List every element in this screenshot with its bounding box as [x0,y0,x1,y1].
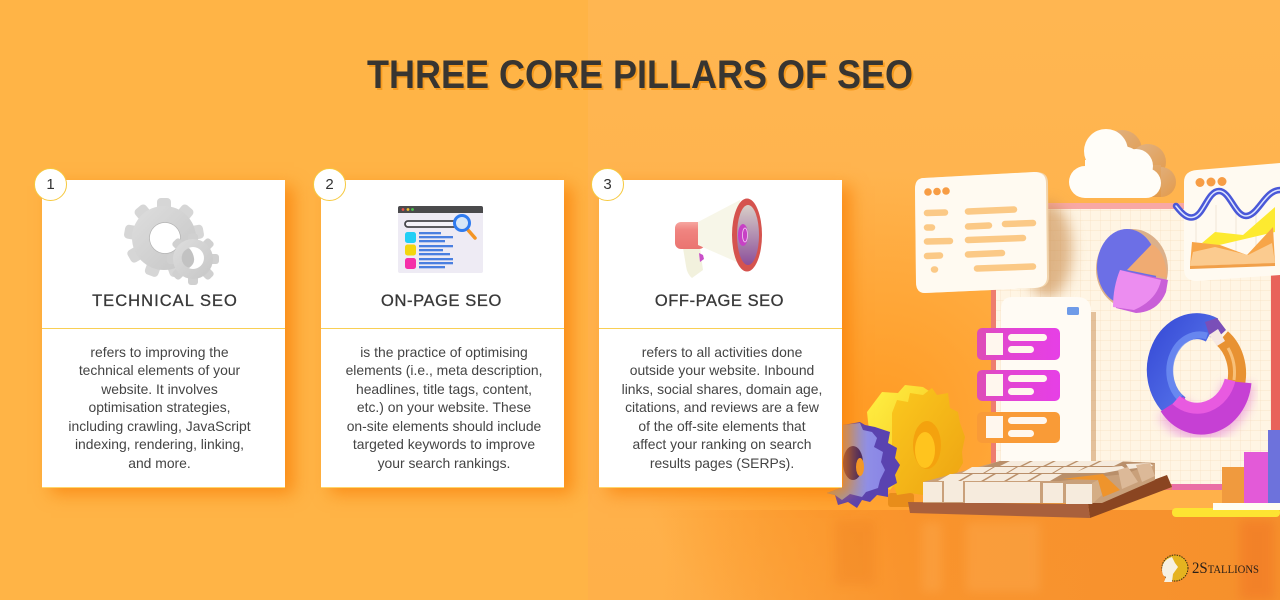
heading: ON-PAGE SEO [381,292,502,310]
text block: headlines, title tags, content, [356,381,532,397]
logo: 2Stallions [1162,554,1259,582]
keyboard [908,461,1172,518]
text block: refers to improving the [90,344,229,360]
panel: on-page SEO [321,180,564,488]
text block: affect your ranking on search [633,436,811,452]
text block: of the off-site elements that [638,418,806,434]
text block: results pages (SERPs). [650,455,794,471]
heading: OFF-PAGE SEO [655,292,784,310]
text block: optimisation strategies, [88,399,231,415]
text block: on-site elements should include [347,418,541,434]
badge: 2 [313,168,346,201]
text block: and more. [128,455,191,471]
text block: citations, and reviews are a few [625,399,819,415]
gear: yellow [867,385,965,507]
icon: megaphone [675,198,762,278]
window: code card [915,172,1049,293]
icon: horse head [1162,555,1188,582]
pie chart [1096,229,1168,313]
text block: including crawling, JavaScript [68,418,251,434]
list items [977,328,1060,443]
text block: etc.) on your website. These [357,399,531,415]
panel: technical SEO [42,180,285,488]
donut chart [1160,318,1238,425]
icon: browser search [398,206,483,273]
text block [68,344,251,471]
text block: elements (i.e., meta description, [346,362,542,378]
text block: indexing, rendering, linking, [75,436,244,452]
gear: purple [827,422,900,508]
text block: links, social shares, domain age, [622,381,822,397]
badge: 3: 3 [603,176,612,193]
badge: 3 [591,168,624,201]
text block: your search rankings. [378,455,510,471]
phone [1001,297,1096,482]
bar chart [1172,430,1280,517]
badge: 1 [34,168,67,201]
illustration: SEO dashboard [827,129,1280,518]
text block: website. It involves [101,381,218,397]
text block: is the practice of optimising [360,344,528,360]
text block: targeted keywords to improve [353,436,535,452]
text block: refers to all activities done [642,344,802,360]
text block [346,344,542,471]
board [991,203,1280,490]
panel: off-page SEO [599,180,842,488]
badge: 2: 2 [325,176,334,193]
logo: 2Stallions: 2STALLIONS [1192,560,1259,577]
chart card [1176,163,1280,281]
badge: 1: 1 [46,176,55,193]
heading: TECHNICAL SEO [92,292,238,310]
text block: technical elements of your [79,362,240,378]
cloud [1069,129,1176,198]
icon: gears [124,198,219,285]
text block: outside your website. Inbound [630,362,814,378]
text block [622,344,822,471]
title: THREE CORE PILLARS OF SEO [367,53,913,97]
